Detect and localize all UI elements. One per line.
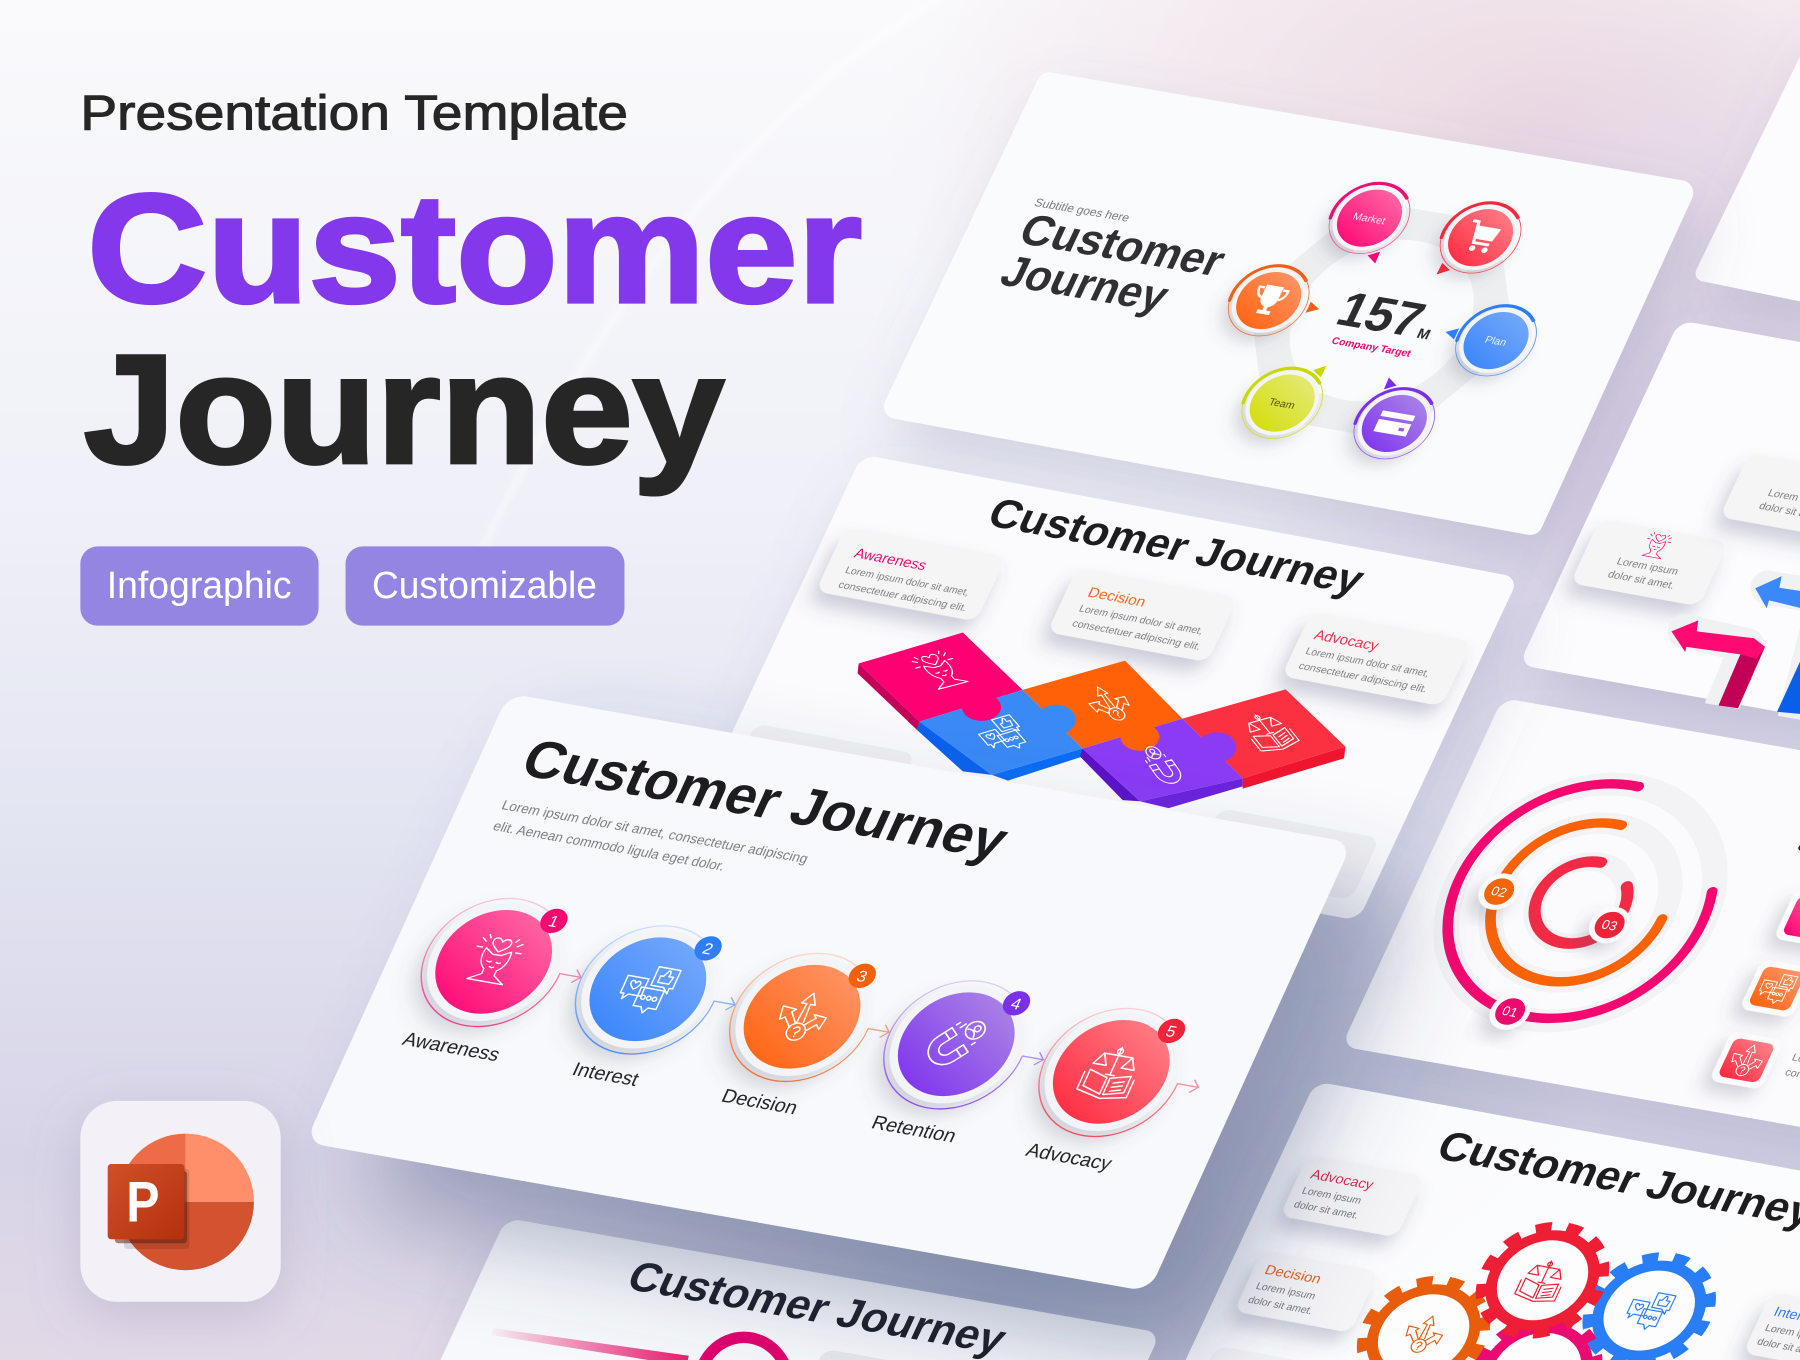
slide title: Customer Journey bbox=[981, 490, 1372, 603]
gray card bbox=[793, 1349, 968, 1360]
node: Cart bbox=[1427, 197, 1534, 279]
outer pink arc bbox=[1406, 764, 1756, 1038]
tile captions bbox=[1699, 844, 1800, 1088]
card: Advocacy bbox=[1281, 611, 1472, 706]
icon tile: pink bbox=[1773, 889, 1800, 948]
arrow marker bbox=[1433, 263, 1450, 278]
node: Plan bbox=[1443, 299, 1549, 382]
pink arrow bbox=[1671, 620, 1765, 708]
gear: orange bbox=[1343, 1271, 1504, 1360]
lower cards bbox=[726, 721, 1380, 903]
node: Team: Team bbox=[1267, 396, 1297, 412]
slide: company target ring bbox=[897, 85, 1681, 522]
eyebrow: Presentation Template: Presentation Template bbox=[80, 86, 628, 141]
card: Awareness bbox=[816, 527, 1006, 621]
arrow marker bbox=[1443, 326, 1459, 339]
badge 03 bbox=[1582, 904, 1637, 946]
subtitle text: Subtitle goes here bbox=[1032, 196, 1132, 225]
card: Advocacy: Lorem ipsum dolor sit amet, bbox=[1303, 647, 1431, 680]
card: Advocacy bbox=[1280, 1155, 1425, 1237]
arrow marker bbox=[1313, 362, 1330, 377]
step 1: Awareness: Awareness bbox=[399, 1029, 503, 1066]
step 4: Retention bbox=[846, 970, 1072, 1156]
card: Decision: Lorem ipsum dolor sit amet, bbox=[1077, 604, 1205, 637]
card: Decision: consectetuer adipiscing elit. bbox=[1070, 619, 1202, 653]
card: Decision: Decision bbox=[1262, 1262, 1324, 1286]
badge 03: 03 bbox=[1599, 917, 1620, 933]
step 5: Advocacy: Advocacy bbox=[1022, 1140, 1115, 1175]
tag: Infographic bbox=[80, 546, 319, 626]
step 4: Retention: Retention bbox=[868, 1112, 960, 1147]
hub value 157M: 157 bbox=[1329, 281, 1434, 347]
intro paragraph: elit. Aenean commodo ligula eget dolor. bbox=[491, 818, 728, 874]
card: Advocacy: consectetuer adipiscing elit. bbox=[1297, 661, 1429, 695]
step 2: Interest: Interest bbox=[569, 1059, 643, 1091]
slide title: Customer Journey bbox=[620, 1253, 1014, 1360]
node: Trophy bbox=[1216, 259, 1322, 342]
badge 01: 01 bbox=[1500, 1004, 1521, 1020]
card: Awareness: Lorem ipsum dolor sit amet, bbox=[843, 565, 971, 599]
card: awareness icon: Lorem ipsum bbox=[1615, 556, 1680, 578]
node: Team bbox=[1229, 362, 1335, 444]
intro paragraph: Lorem ipsum dolor sit amet, consectetuer adipiscing bbox=[499, 797, 811, 866]
card: Advocacy: Advocacy bbox=[1311, 628, 1382, 654]
slide: turning arrows bbox=[1519, 320, 1800, 783]
jigsaw: red piece bbox=[1182, 689, 1345, 778]
card: Decision: Lorem ipsum bbox=[1254, 1281, 1317, 1302]
headline: Journey: Journey bbox=[84, 323, 724, 496]
step 1: Awareness: 1 bbox=[545, 913, 562, 931]
gear: red bbox=[1462, 1217, 1623, 1343]
pink ring bbox=[699, 1337, 789, 1360]
jigsaw: purple piece bbox=[1083, 719, 1243, 801]
node: Plan: Plan bbox=[1483, 334, 1509, 349]
arrow marker bbox=[1306, 302, 1322, 315]
step 3: Decision bbox=[692, 943, 917, 1129]
card: Advocacy: dolor sit amet. bbox=[1292, 1200, 1360, 1222]
tag: Customizable: Customizable bbox=[372, 565, 597, 607]
slide: top right corner partial bbox=[1704, 23, 1800, 301]
fading line bbox=[491, 1328, 689, 1360]
card: lower left bbox=[1188, 1345, 1333, 1360]
node: Wallet bbox=[1341, 382, 1448, 465]
tag: Infographic: Infographic bbox=[107, 565, 292, 607]
gear: pink bbox=[1455, 1310, 1616, 1360]
hub value 157M: M bbox=[1414, 326, 1433, 343]
icon: PowerPoint app tile bbox=[80, 1101, 281, 1302]
headline: Customer: Customer bbox=[87, 162, 862, 335]
step 5: Advocacy bbox=[1001, 998, 1227, 1184]
inner red arc bbox=[1520, 855, 1642, 950]
card: Decision: dolor sit amet. bbox=[1246, 1295, 1314, 1317]
card: second step bbox=[1720, 453, 1800, 541]
slide: funnel lower bbox=[345, 1218, 1161, 1360]
node: Market: Market bbox=[1351, 211, 1387, 227]
step 3: Decision: 3 bbox=[854, 968, 870, 986]
step 2: Interest: 2 bbox=[699, 940, 716, 958]
card: awareness icon bbox=[1570, 519, 1729, 606]
card: Advocacy: Advocacy bbox=[1308, 1166, 1378, 1192]
card: awareness icon: dolor sit amet. bbox=[1606, 569, 1677, 592]
icon tile: chat bbox=[1739, 959, 1800, 1018]
badge 01 bbox=[1483, 990, 1537, 1033]
ring tracks bbox=[1403, 764, 1757, 1041]
step 3: Decision: Decision bbox=[718, 1086, 801, 1119]
step 5: Advocacy: 5 bbox=[1163, 1023, 1179, 1041]
slide: gears bbox=[1155, 1081, 1800, 1360]
card: Advocacy: Lorem ipsum bbox=[1300, 1186, 1363, 1207]
card: Decision bbox=[1047, 567, 1238, 662]
jigsaw: pink piece bbox=[859, 633, 1023, 722]
card: Awareness: Awareness bbox=[851, 546, 929, 574]
tag: Customizable bbox=[346, 546, 624, 626]
badge 02: 02 bbox=[1489, 884, 1510, 900]
slide title: Journey bbox=[993, 246, 1177, 321]
card: Decision bbox=[1234, 1250, 1379, 1333]
slide title: Customer Journey bbox=[513, 728, 1018, 871]
middle orange arc bbox=[1462, 810, 1699, 995]
card: Awareness: consectetuer adipiscing elit. bbox=[836, 580, 969, 614]
icon: PowerPoint app tile: P bbox=[126, 1170, 160, 1234]
step 1: Awareness bbox=[384, 888, 609, 1074]
connector ring bbox=[1225, 208, 1538, 433]
blue arrow bbox=[1755, 576, 1800, 714]
node: Market bbox=[1316, 177, 1423, 259]
jigsaw: orange piece bbox=[1023, 661, 1182, 748]
slide title: Customer bbox=[1012, 205, 1233, 286]
badge 02 bbox=[1472, 870, 1526, 913]
icon tile: decision bbox=[1709, 1031, 1784, 1090]
hub value 157M: Company Target bbox=[1329, 336, 1413, 360]
arrow marker bbox=[1383, 376, 1397, 389]
slide: jigsaw puzzle bbox=[701, 455, 1519, 921]
arrow channels bbox=[1685, 588, 1800, 735]
card: Interest bbox=[1743, 1292, 1800, 1360]
slide title bbox=[993, 205, 1233, 327]
jigsaw: blue piece bbox=[920, 690, 1083, 775]
card: Decision: Decision bbox=[1085, 585, 1148, 611]
arrow marker bbox=[1368, 252, 1382, 265]
slide: main five step journey bbox=[305, 693, 1352, 1292]
slide: concentric progress rings bbox=[1341, 698, 1800, 1161]
jigsaw: side walls bbox=[858, 664, 1345, 808]
gear: blue bbox=[1568, 1248, 1730, 1360]
step 2: Interest bbox=[538, 915, 763, 1101]
step 4: Retention: 4 bbox=[1008, 995, 1024, 1013]
